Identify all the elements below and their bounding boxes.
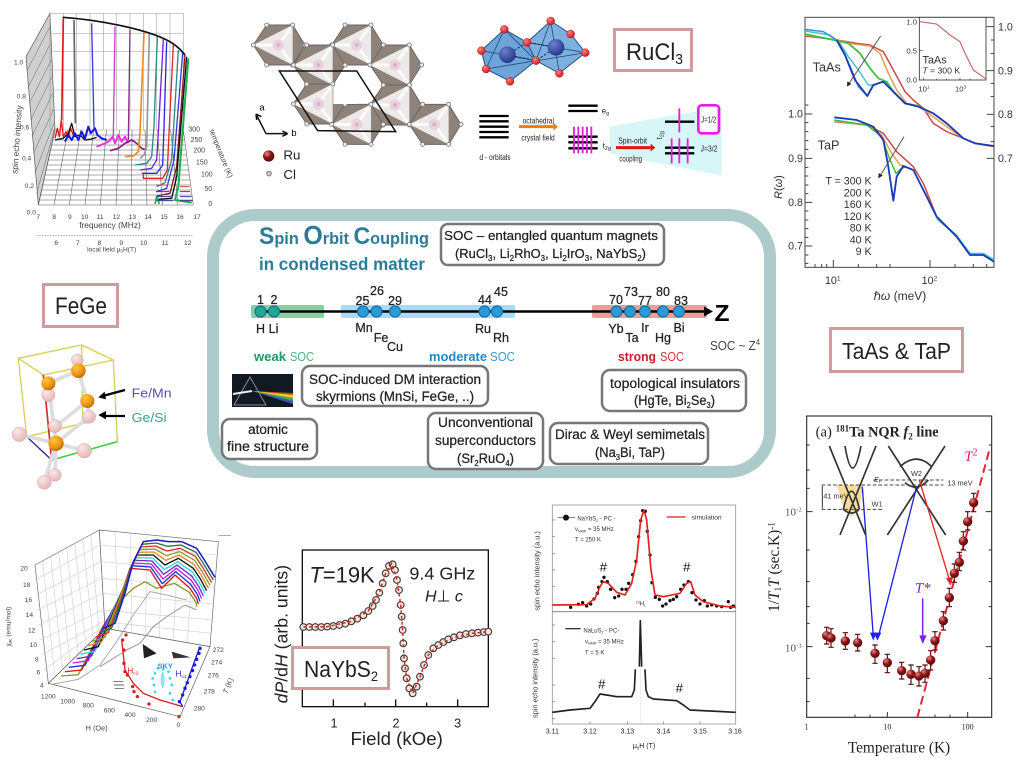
diagram: d-orbital splitting: 2g bbox=[605, 146, 611, 152]
diagram: d-orbital splitting: e bbox=[602, 106, 606, 115]
box: SOC entangled quantum magnets: 3 bbox=[541, 254, 546, 263]
chart: TaAs and TaP reflectivity: 0.9 bbox=[998, 65, 1013, 77]
atomic number axis: 45 bbox=[494, 285, 508, 299]
soc strength labels: SOC bbox=[490, 349, 515, 364]
chart: FeGe 3D spin echo spectra: 10 bbox=[140, 240, 148, 247]
chart: 181Ta NQR relaxation rate: 100 bbox=[962, 722, 974, 731]
diagram: FeGe unit cell: Ge/Si bbox=[132, 411, 167, 425]
chart: 181Ta NQR relaxation rate: 10 bbox=[785, 507, 796, 519]
chart: TaAs and TaP reflectivity: ℏω (meV) bbox=[873, 289, 926, 303]
chart: TaAs and TaP reflectivity: TaAs bbox=[813, 60, 841, 74]
box: topological insulators bbox=[602, 370, 746, 411]
box: Dirac and Weyl semimetals bbox=[550, 423, 708, 464]
chart: FeGe 3D ac susceptibility: 0 bbox=[176, 722, 180, 729]
chart: TaAs and TaP reflectivity: 1 bbox=[927, 85, 930, 90]
chart: FeGe 3D spin echo spectra: 12 bbox=[113, 214, 120, 221]
chart: TaAs and TaP reflectivity: T = 300 K bbox=[922, 65, 960, 75]
chart: 181Ta NQR relaxation rate: 1 bbox=[805, 722, 809, 731]
box: SOC entangled quantum magnets: (RuCl bbox=[455, 246, 488, 261]
diagram: d-orbital splitting: 2g bbox=[660, 131, 666, 137]
box: unconventional superconductors bbox=[428, 413, 543, 469]
chart: NMR spectra NaYbS2 and NaLuS2: L bbox=[644, 604, 646, 608]
atomic number axis: 2 bbox=[271, 293, 278, 307]
chart: FeGe 3D spin echo spectra: 50 bbox=[204, 186, 212, 193]
chart: NMR spectra NaYbS2 and NaLuS2: H (T) bbox=[639, 743, 655, 750]
box: SOC entangled quantum magnets: SOC – entangled quantum magnets bbox=[444, 228, 659, 243]
chart: 181Ta NQR relaxation rate bbox=[766, 416, 992, 756]
chart: FeGe 3D spin echo spectra: 0.6 bbox=[20, 124, 30, 131]
box: unconventional superconductors: superconductors bbox=[435, 433, 536, 448]
atomic number axis: 73 bbox=[624, 285, 638, 299]
chart: FeGe 3D spin echo spectra: 11 bbox=[162, 240, 169, 247]
diagram: d-orbital splitting: t bbox=[603, 141, 605, 150]
box: Dirac and Weyl semimetals: (Na bbox=[595, 445, 617, 460]
chart: TaAs and TaP reflectivity: 0.8 bbox=[998, 109, 1013, 121]
box: SOC entangled quantum magnets: , Li bbox=[545, 246, 562, 261]
box: Dirac and Weyl semimetals: Bi, TaP) bbox=[620, 445, 665, 460]
box: SOC entangled quantum magnets: 2 bbox=[637, 254, 642, 263]
chart: 181Ta NQR relaxation rate: -2 bbox=[796, 507, 802, 514]
chart: FeGe 3D ac susceptibility: 1200 bbox=[41, 694, 56, 701]
chart: FeGe 3D ac susceptibility: H (Oe) bbox=[86, 723, 108, 732]
diagram: d-orbital splitting: octahedral bbox=[523, 115, 554, 125]
chart: RuCl3 honeycomb crystal structure: Cl bbox=[283, 167, 296, 182]
chart: FeGe 3D ac susceptibility: 272 bbox=[213, 647, 224, 654]
chart: FeGe 3D ac susceptibility: 14 bbox=[26, 612, 33, 619]
label: FeGe bbox=[44, 284, 118, 326]
chart: TaAs and TaP reflectivity: 200 K bbox=[844, 187, 872, 199]
chart: NMR spectra NaYbS2 and NaLuS2: NMR bbox=[578, 529, 587, 533]
chart: RuCl3 honeycomb crystal structure: a bbox=[259, 103, 265, 113]
atomic number axis: Rh bbox=[493, 331, 509, 345]
box: SOC entangled quantum magnets: 3 bbox=[585, 254, 590, 263]
chart: FeGe 3D spin echo spectra: 1.0 bbox=[14, 60, 24, 67]
chart: FeGe 3D spin echo spectra: 8 bbox=[52, 214, 56, 221]
box: SOC entangled quantum magnets: , Li bbox=[492, 246, 510, 261]
chart: TaAs and TaP reflectivity: TaAs bbox=[922, 54, 947, 66]
chart: FeGe 3D spin echo spectra: 0 bbox=[121, 249, 124, 254]
panel: spin orbit coupling in condensed matter bbox=[213, 215, 770, 472]
chart: FeGe 3D ac susceptibility: ac bbox=[8, 638, 13, 643]
chart: FeGe 3D spin echo spectra: 14 bbox=[144, 214, 152, 221]
chart: 181Ta NQR relaxation rate: 2 bbox=[908, 431, 913, 441]
atomic number axis: Ru bbox=[475, 322, 491, 336]
atomic number axis: 77 bbox=[638, 294, 652, 308]
chart: FeGe 3D spin echo spectra: 150 bbox=[196, 159, 208, 166]
chart: 181Ta NQR relaxation rate: W2 bbox=[911, 469, 922, 478]
box: DM interaction skyrmions: SOC-induced DM interaction bbox=[309, 372, 481, 387]
soc strength labels bbox=[253, 349, 684, 364]
icon: RuCl3 edge-sharing octahedra bbox=[477, 17, 589, 85]
box: atomic fine structure bbox=[222, 419, 317, 459]
chart: NMR spectra NaYbS2 and NaLuS2: simulation bbox=[692, 514, 722, 521]
label: RuCl3: 3 bbox=[675, 51, 683, 68]
chart: TaAs and TaP reflectivity: TaP bbox=[818, 139, 839, 153]
chart: TaAs and TaP reflectivity: 10 bbox=[825, 275, 837, 287]
chart: NMR spectra NaYbS2 and NaLuS2: 2 bbox=[602, 631, 604, 635]
label: TaAs and TaP: TaAs & TaP bbox=[842, 338, 951, 364]
chart: FeGe 3D ac susceptibility: 600 bbox=[104, 708, 115, 715]
atomic number axis: 26 bbox=[370, 284, 384, 298]
chart: 181Ta NQR relaxation rate: 41 meV bbox=[823, 491, 849, 500]
chart: NMR spectra NaYbS2 and NaLuS2: spin echo intensity (a.u.) bbox=[531, 639, 540, 718]
atomic number axis: 44 bbox=[478, 293, 492, 307]
chart: NMR spectra NaYbS2 and NaLuS2: NaYbS bbox=[577, 517, 596, 523]
chart: NMR spectra NaYbS2 and NaLuS2: # bbox=[598, 676, 606, 691]
chart: FeGe 3D ac susceptibility: T (K) bbox=[221, 676, 235, 695]
chart: NMR spectra NaYbS2 and NaLuS2: 3.12 bbox=[583, 728, 597, 735]
chart: FeGe 3D spin echo spectra: 6 bbox=[54, 240, 58, 247]
chart: FeGe 3D ac susceptibility: 4 bbox=[40, 683, 44, 690]
chart: 181Ta NQR relaxation rate: E bbox=[874, 475, 879, 484]
chart: TaAs and TaP reflectivity: 160 K bbox=[844, 199, 872, 211]
diagram: d-orbital splitting: d - orbitals bbox=[479, 152, 511, 162]
atomic number axis: 25 bbox=[356, 294, 369, 308]
soc strength labels: moderate bbox=[429, 349, 487, 364]
diagram: FeGe unit cell: Fe/Mn bbox=[132, 386, 172, 400]
chart: 181Ta NQR relaxation rate: 10 bbox=[883, 722, 891, 731]
box: topological insulators: (HgTe, Bi bbox=[634, 393, 690, 408]
chart: NaYbS2 ESR derivative: dP/dH (arb. units) bbox=[271, 565, 291, 703]
box: topological insulators: 2 bbox=[687, 401, 691, 410]
chart: FeGe 3D ac susceptibility: 10 bbox=[30, 642, 37, 649]
box: unconventional superconductors: 2 bbox=[474, 459, 479, 468]
box: topological insulators: ) bbox=[711, 393, 715, 408]
chart: TaAs and TaP reflectivity: 1.0 bbox=[906, 17, 917, 26]
chart: TaAs and TaP reflectivity: 10 bbox=[922, 275, 934, 287]
chart: FeGe 3D spin echo spectra: H(T) bbox=[123, 247, 136, 254]
chart: FeGe 3D spin echo spectra: 0 bbox=[208, 201, 212, 208]
chart: NaYbS2 ESR derivative: 2 bbox=[392, 716, 400, 730]
chart: FeGe 3D spin echo spectra: 7 bbox=[36, 214, 40, 221]
chart: FeGe 3D ac susceptibility: 16 bbox=[25, 597, 32, 604]
diagram: d-orbital splitting: Spin-orbit bbox=[618, 135, 648, 145]
atomic number axis: 70 bbox=[609, 293, 623, 307]
chart: FeGe 3D ac susceptibility: H bbox=[127, 666, 133, 675]
box: SOC entangled quantum magnets: 2 bbox=[510, 254, 515, 263]
chart: FeGe 3D spin echo spectra: 13 bbox=[129, 214, 136, 221]
chart: FeGe 3D spin echo spectra: 0.2 bbox=[25, 183, 34, 190]
atomic number axis: Ta bbox=[625, 331, 639, 345]
chart: 181Ta NQR relaxation rate: Ta NQR bbox=[849, 425, 904, 441]
soc strength labels: weak bbox=[253, 349, 287, 364]
chart: NaYbS2 ESR derivative: H⊥ c bbox=[425, 589, 463, 606]
chart: RuCl3 honeycomb crystal structure: b bbox=[291, 128, 297, 138]
chart: FeGe 3D ac susceptibility: c2 bbox=[133, 671, 139, 677]
chart: FeGe 3D ac susceptibility: SKY bbox=[158, 661, 173, 670]
label: FeGe: FeGe bbox=[55, 293, 107, 320]
atomic number axis: Fe bbox=[374, 331, 388, 345]
box: SOC entangled quantum magnets: IrO bbox=[567, 246, 585, 261]
chart: TaAs and TaP reflectivity: 9 K bbox=[856, 246, 872, 258]
chart: NaYbS2 ESR derivative: Field (kOe) bbox=[351, 728, 443, 749]
chart: FeGe 3D spin echo spectra: frequency (MHz) bbox=[79, 220, 141, 230]
chart: 181Ta NQR relaxation rate: T* bbox=[915, 581, 931, 597]
label: NaYbS2: NaYbS bbox=[304, 656, 377, 682]
atomic number axis: 29 bbox=[388, 294, 402, 308]
chart: 181Ta NQR relaxation rate: W1 bbox=[872, 500, 883, 509]
chart: FeGe 3D spin echo spectra: 10 bbox=[81, 214, 89, 221]
chart: FeGe 3D ac susceptibility: 18 bbox=[23, 582, 31, 589]
chart: TaAs and TaP reflectivity: 120 K bbox=[844, 211, 872, 223]
chart: NMR spectra NaYbS2 and NaLuS2: 3.11 bbox=[546, 728, 559, 735]
chart: NMR spectra NaYbS2 and NaLuS2: = 35 MHz bbox=[586, 527, 614, 533]
chart: TaAs and TaP reflectivity: 0.5 bbox=[906, 46, 917, 55]
chart: NMR spectra NaYbS2 and NaLuS2: NaLuS bbox=[583, 628, 602, 634]
chart: NMR spectra NaYbS2 and NaLuS2: μ bbox=[633, 743, 637, 750]
chart: FeGe 3D spin echo spectra: local field μ bbox=[87, 247, 121, 254]
chart: FeGe 3D ac susceptibility: 278 bbox=[204, 689, 215, 696]
chart: NMR spectra NaYbS2 and NaLuS2: # bbox=[683, 560, 691, 575]
box: SOC entangled quantum magnets: RhO bbox=[514, 246, 541, 261]
chart: RuCl3 honeycomb crystal structure: Ru bbox=[283, 147, 300, 162]
box: DM interaction skyrmions: skyrmions (MnSi, FeGe, ..) bbox=[316, 389, 474, 404]
subtitle: in condensed matter bbox=[259, 254, 425, 274]
diagram: d-orbital splitting: t bbox=[655, 137, 664, 139]
box: SOC entangled quantum magnets: 2 bbox=[562, 254, 567, 263]
box: unconventional superconductors: (Sr bbox=[457, 451, 475, 466]
box: unconventional superconductors: Unconventional bbox=[438, 415, 533, 430]
chart: TaAs and TaP reflectivity: 80 K bbox=[850, 223, 872, 235]
chart: FeGe 3D spin echo spectra bbox=[9, 13, 235, 254]
diagram: d-orbital splitting: g bbox=[606, 111, 609, 117]
chart: NMR spectra NaYbS2 and NaLuS2: 3.13 bbox=[621, 728, 634, 735]
chart: NaYbS2 ESR derivative: T=19K bbox=[309, 562, 375, 587]
chart: FeGe 3D ac susceptibility: 800 bbox=[83, 703, 94, 710]
box: SOC entangled quantum magnets bbox=[441, 224, 664, 265]
chart: FeGe 3D ac susceptibility: c1 bbox=[181, 674, 187, 680]
chart: NMR spectra NaYbS2 and NaLuS2: NMR bbox=[588, 642, 597, 646]
atomic number axis: Ir bbox=[641, 321, 649, 335]
box: topological insulators: Se bbox=[691, 393, 707, 408]
soc strength labels: SOC bbox=[660, 349, 684, 364]
chart: 181Ta NQR relaxation rate: T bbox=[964, 449, 972, 465]
chart: NMR spectra NaYbS2 and NaLuS2: 0 bbox=[637, 745, 640, 750]
box: SOC entangled quantum magnets: , NaYbS bbox=[589, 246, 638, 261]
chart: NMR spectra NaYbS2 and NaLuS2: 23 bbox=[636, 600, 640, 604]
chart: NMR spectra NaYbS2 and NaLuS2: ν bbox=[575, 527, 578, 533]
box: unconventional superconductors: 4 bbox=[505, 459, 510, 468]
chart: FeGe 3D spin echo spectra: 11 bbox=[97, 214, 104, 221]
chart: NaYbS2 ESR derivative: 9.4 GHz bbox=[409, 564, 475, 584]
chart: FeGe 3D ac susceptibility bbox=[5, 530, 235, 732]
atomic number axis: 83 bbox=[674, 294, 688, 308]
chart: FeGe 3D spin echo spectra: 200 bbox=[193, 148, 205, 155]
chart: TaAs and TaP reflectivity: 0.9 bbox=[788, 153, 803, 165]
chart: 181Ta NQR relaxation rate: T bbox=[766, 577, 783, 587]
label: RuCl3 bbox=[614, 30, 692, 70]
chart: NaYbS2 ESR derivative: 3 bbox=[454, 716, 461, 730]
chart: FeGe 3D spin echo spectra: 8 bbox=[98, 240, 102, 247]
atomic number axis: 80 bbox=[656, 285, 670, 299]
chart: FeGe 3D ac susceptibility: χ bbox=[5, 643, 12, 647]
chart: FeGe 3D spin echo spectra: spin echo intensity bbox=[9, 104, 24, 174]
diagram: d-orbital splitting: coupling bbox=[619, 154, 642, 164]
atomic number axis bbox=[251, 284, 730, 354]
chart: TaAs and TaP reflectivity: 0.8 bbox=[788, 197, 803, 209]
box: Dirac and Weyl semimetals: Dirac & Weyl semimetals bbox=[555, 427, 705, 442]
atomic number axis: Cu bbox=[387, 340, 403, 354]
chart: FeGe 3D spin echo spectra: 9 bbox=[119, 240, 123, 247]
chart: 181Ta NQR relaxation rate: F bbox=[879, 479, 883, 484]
atomic number axis: Mn bbox=[355, 321, 373, 335]
formula: SOC ~ Z4: 4 bbox=[756, 338, 761, 347]
chart: FeGe 3D spin echo spectra: 15 bbox=[160, 214, 168, 221]
title: Spin Orbit Coupling bbox=[259, 220, 429, 250]
chart: TaAs and TaP reflectivity: 1.0 bbox=[998, 21, 1013, 33]
chart: 181Ta NQR relaxation rate: (sec.K) bbox=[766, 530, 783, 574]
box: atomic fine structure: fine structure bbox=[227, 439, 309, 454]
chart: TaAs and TaP reflectivity: 0.0 bbox=[906, 76, 917, 85]
chart: 181Ta NQR relaxation rate: 13 meV bbox=[947, 478, 973, 487]
chart: TaAs and TaP reflectivity: 1 bbox=[837, 276, 841, 283]
chart: FeGe 3D spin echo spectra: 0.0 bbox=[27, 209, 36, 216]
chart: NMR spectra NaYbS2 and NaLuS2: - PC - bbox=[598, 517, 616, 523]
box: SOC entangled quantum magnets: 3 bbox=[488, 254, 493, 263]
chart: RuCl3 honeycomb crystal structure bbox=[251, 23, 463, 182]
diagram: d-orbital splitting: crystal field bbox=[521, 133, 555, 143]
box: DM interaction skyrmions bbox=[302, 366, 488, 406]
chart: 181Ta NQR relaxation rate: -3 bbox=[796, 643, 802, 650]
diagram: FeGe unit cell bbox=[12, 345, 172, 489]
chart: 181Ta NQR relaxation rate: 2 bbox=[972, 448, 977, 459]
chart: NMR spectra NaYbS2 and NaLuS2: = 35 MHz bbox=[596, 639, 624, 645]
chart: NMR spectra NaYbS2 and NaLuS2: 3.15 bbox=[693, 728, 707, 735]
chart: TaAs and TaP reflectivity bbox=[773, 17, 1013, 303]
chart: TaAs and TaP reflectivity: 0.7 bbox=[998, 153, 1013, 165]
chart: FeGe 3D ac susceptibility: 274 bbox=[211, 659, 223, 666]
chart: NMR spectra NaYbS2 and NaLuS2: 2 bbox=[596, 519, 598, 523]
atomic number axis: 1 bbox=[257, 293, 264, 307]
chart: NMR spectra NaYbS2 and NaLuS2: # bbox=[676, 680, 684, 695]
chart: TaAs and TaP reflectivity: 10 bbox=[955, 84, 964, 93]
chart: FeGe 3D ac susceptibility: 400 bbox=[124, 712, 136, 719]
chart: FeGe 3D spin echo spectra: temperature (K) bbox=[207, 128, 235, 179]
soc strength labels: SOC bbox=[290, 349, 314, 364]
chart: NMR spectra NaYbS2 and NaLuS2 bbox=[531, 505, 742, 750]
box: topological insulators: topological insulators bbox=[610, 376, 740, 391]
chart: FeGe 3D ac susceptibility: H bbox=[176, 670, 181, 679]
chart: NMR spectra NaYbS2 and NaLuS2: spin echo intensity (a.u.) bbox=[532, 531, 541, 611]
chart: TaAs and TaP reflectivity: 0.7 bbox=[788, 241, 803, 253]
box: atomic fine structure: atomic bbox=[248, 422, 288, 437]
diagram: d-orbital splitting bbox=[479, 105, 722, 176]
chart: NaYbS2 ESR derivative bbox=[271, 550, 492, 749]
chart: NMR spectra NaYbS2 and NaLuS2: 3.14 bbox=[657, 728, 670, 735]
atomic number axis: Yb bbox=[608, 322, 624, 336]
soc strength labels: strong bbox=[618, 349, 656, 364]
box: SOC entangled quantum magnets: ) bbox=[642, 246, 646, 261]
chart: TaAs and TaP reflectivity: 10 bbox=[918, 84, 927, 93]
atomic number axis: Z bbox=[714, 300, 730, 326]
chart: FeGe 3D spin echo spectra: 250 bbox=[191, 137, 202, 144]
chart: FeGe 3D spin echo spectra: 100 bbox=[201, 172, 213, 179]
chart: FeGe 3D spin echo spectra: 9 bbox=[68, 214, 72, 221]
chart: NMR spectra NaYbS2 and NaLuS2: - PC- bbox=[604, 628, 619, 634]
chart: FeGe 3D spin echo spectra: 17 bbox=[193, 214, 201, 221]
chart: NaYbS2 ESR derivative: 1 bbox=[330, 716, 338, 730]
diagram: d-orbital splitting: J=3/2 bbox=[701, 144, 717, 154]
chart: FeGe 3D spin echo spectra: 0.4 bbox=[22, 155, 32, 162]
chart: TaAs and TaP reflectivity: 40 K bbox=[850, 234, 872, 246]
icon: prism bbox=[232, 374, 293, 407]
chart: FeGe 3D spin echo spectra: 16 bbox=[176, 214, 184, 221]
box: unconventional superconductors: RuO bbox=[479, 451, 505, 466]
chart: FeGe 3D ac susceptibility: (emu/mol) bbox=[5, 607, 12, 639]
chart: FeGe 3D spin echo spectra: 300 bbox=[188, 127, 200, 134]
atomic number axis: Bi bbox=[673, 321, 685, 335]
chart: 181Ta NQR relaxation rate: f bbox=[904, 425, 910, 441]
chart: 181Ta NQR relaxation rate: 1/T bbox=[766, 592, 783, 612]
atomic number axis: Hg bbox=[655, 331, 671, 345]
box: Dirac and Weyl semimetals: 3 bbox=[616, 453, 621, 462]
atomic number axis: H bbox=[256, 322, 265, 336]
chart: TaAs and TaP reflectivity: 1.0 bbox=[788, 109, 803, 121]
chart: FeGe 3D ac susceptibility: 20 bbox=[20, 565, 28, 572]
label: NaYbS2: 2 bbox=[371, 668, 378, 684]
chart: NMR spectra NaYbS2 and NaLuS2: T = 5 K bbox=[585, 650, 604, 656]
chart: TaAs and TaP reflectivity: R(ω) bbox=[773, 175, 785, 199]
chart: 181Ta NQR relaxation rate: 10 bbox=[785, 643, 796, 655]
chart: FeGe 3D ac susceptibility: 12 bbox=[28, 628, 36, 635]
chart: NMR spectra NaYbS2 and NaLuS2: # bbox=[600, 560, 608, 575]
chart: FeGe 3D ac susceptibility: 1000 bbox=[60, 699, 75, 706]
chart: 181Ta NQR relaxation rate: Temperature (K) bbox=[848, 739, 950, 756]
label: RuCl3: RuCl bbox=[626, 39, 679, 66]
chart: TaAs and TaP reflectivity: 3 bbox=[964, 85, 967, 90]
chart: 181Ta NQR relaxation rate: (a) bbox=[816, 425, 832, 441]
formula: SOC ~ Z4: SOC ~ Z bbox=[710, 339, 759, 353]
label: TaAs and TaP bbox=[830, 328, 962, 372]
atomic number axis: Li bbox=[269, 322, 278, 336]
chart: 181Ta NQR relaxation rate: 181 bbox=[836, 423, 850, 433]
chart: FeGe 3D ac susceptibility: 280 bbox=[194, 705, 205, 712]
chart: FeGe 3D ac susceptibility: 8 bbox=[35, 656, 39, 663]
chart: TaAs and TaP reflectivity: T = 300 K bbox=[825, 175, 872, 187]
chart: FeGe 3D spin echo spectra: 0.8 bbox=[17, 94, 26, 101]
chart: NMR spectra NaYbS2 and NaLuS2: ν bbox=[585, 639, 588, 645]
diagram: d-orbital splitting: J=1/2 bbox=[701, 115, 716, 125]
chart: FeGe 3D ac susceptibility: 200 bbox=[146, 717, 158, 724]
chart: NMR spectra NaYbS2 and NaLuS2: 3.16 bbox=[728, 728, 742, 735]
chart: TaAs and TaP reflectivity: 2 bbox=[934, 276, 938, 283]
chart: FeGe 3D ac susceptibility: 276 bbox=[208, 673, 219, 680]
chart: NMR spectra NaYbS2 and NaLuS2: H bbox=[640, 601, 644, 607]
chart: FeGe 3D spin echo spectra: 12 bbox=[184, 240, 192, 247]
chart: 181Ta NQR relaxation rate: 1 bbox=[774, 587, 784, 592]
chart: NMR spectra NaYbS2 and NaLuS2: T = 250 K bbox=[575, 537, 601, 543]
chart: FeGe 3D spin echo spectra: 7 bbox=[76, 240, 80, 247]
chart: 181Ta NQR relaxation rate: line bbox=[913, 425, 939, 441]
label: NaYbS2 bbox=[292, 648, 388, 688]
box: topological insulators: 3 bbox=[707, 401, 711, 410]
chart: 181Ta NQR relaxation rate: -1 bbox=[767, 522, 777, 530]
box: unconventional superconductors: ) bbox=[510, 451, 514, 466]
chart: FeGe 3D ac susceptibility: 6 bbox=[36, 670, 40, 677]
